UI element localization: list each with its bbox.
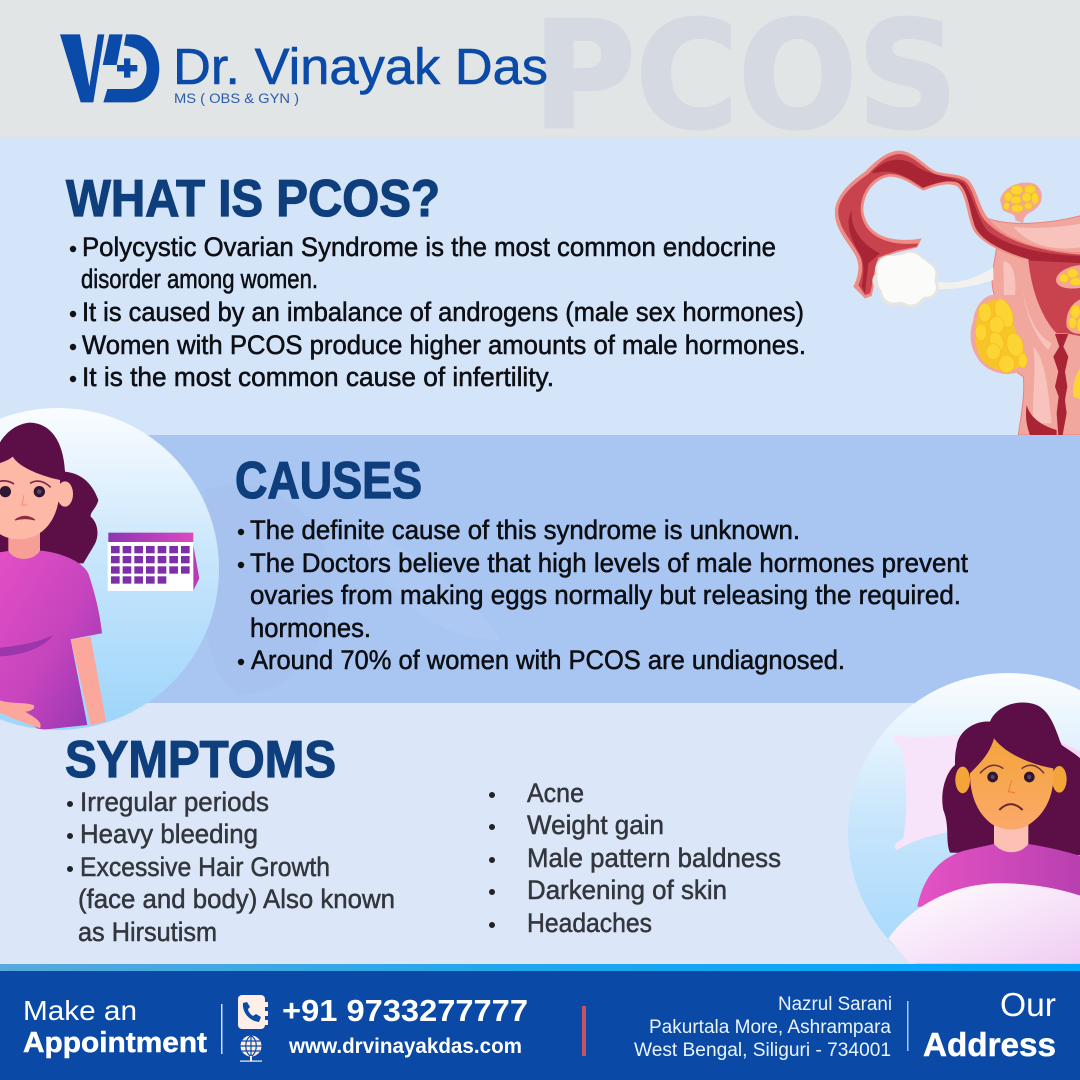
- cyst top: [1000, 182, 1042, 223]
- cyst large left: [970, 294, 1018, 374]
- list: symptoms right: Weight gain: [527, 810, 664, 840]
- heading: causes: CAUSES: [235, 452, 422, 510]
- neck: [8, 530, 40, 559]
- illustration: woman with calendar: [0, 408, 219, 730]
- face: [0, 457, 60, 539]
- ear: [57, 481, 73, 507]
- white ovary: [937, 267, 993, 289]
- list: symptoms left: (face and body) Also known: [78, 884, 395, 914]
- text block: causes: ovaries from making eggs normally but releasing the required.: [250, 580, 961, 610]
- text block: causes: The definite cause of this syndrome is unknown.: [250, 515, 800, 545]
- arm: [71, 637, 106, 725]
- eyes and mouth: [34, 486, 45, 497]
- list: symptoms left: Irregular periods: [80, 787, 269, 817]
- logo: Dr. Vinayak Das: [60, 34, 548, 106]
- shirt: [917, 844, 1080, 910]
- list: symptoms right: Darkening of skin: [527, 875, 727, 905]
- text: our address: Address: [923, 1026, 1056, 1063]
- ears: [955, 766, 1067, 793]
- text block: causes: hormones.: [250, 613, 371, 643]
- cysts right edge: [1056, 265, 1080, 288]
- text block: what is PCOS: It is caused by an imbalance of androgens (male sex hormones): [82, 297, 804, 327]
- hair: [942, 702, 1080, 855]
- uterus body: [983, 215, 1080, 435]
- fallopian tube: [835, 151, 1080, 298]
- icon: calendar: [108, 533, 199, 591]
- panel: header background: [0, 0, 1080, 137]
- text block: causes: [238, 515, 968, 675]
- text block: what is PCOS: Women with PCOS produce higher amounts of male hormones.: [82, 330, 806, 360]
- logo qualification: MS ( OBS & GYN ): [174, 91, 299, 106]
- list: symptoms left: [67, 787, 395, 947]
- footer strip: [0, 964, 1080, 971]
- text: phone number: +91 9733277777: [282, 993, 528, 1028]
- text block: what is PCOS: [70, 232, 806, 392]
- list: symptoms right: Acne: [527, 778, 584, 808]
- text: make an appointment: Make an: [23, 995, 137, 1026]
- text block: causes: The Doctors believe that high levels of male hormones prevent: [250, 548, 968, 578]
- list: symptoms left: Excessive Hair Growth: [80, 852, 330, 882]
- text: make an appointment: Appointment: [23, 1027, 207, 1059]
- text: our address: [923, 986, 1056, 1063]
- neck: [994, 825, 1028, 852]
- face: [970, 738, 1054, 830]
- heading: what is PCOS: WHAT IS PCOS?: [66, 170, 440, 228]
- list: symptoms right: Headaches: [527, 908, 652, 938]
- text: website: www.drvinayakdas.com: [288, 1035, 522, 1058]
- logo name: Dr. Vinayak Das: [173, 38, 548, 95]
- icon: VD monogram: [60, 34, 159, 102]
- text: address lines: Pakurtala More, Ashrampara: [649, 1017, 891, 1038]
- panel: footer: [0, 971, 1080, 1080]
- circle backdrop: [848, 673, 1080, 993]
- list: symptoms right: [489, 778, 781, 938]
- pillow: [894, 734, 961, 850]
- eyes and mouth: [987, 772, 998, 782]
- list: symptoms right: Male pattern baldness: [527, 843, 781, 873]
- text block: what is PCOS: disorder among women.: [81, 264, 318, 294]
- blanket: [888, 883, 1080, 963]
- text block: what is PCOS: Polycystic Ovarian Syndrome is the most common endocrine: [82, 232, 776, 262]
- list: symptoms left: Heavy bleeding: [80, 819, 258, 849]
- text: our address: Our: [1000, 986, 1056, 1023]
- text block: what is PCOS: It is the most common cause of infertility.: [82, 362, 554, 392]
- shirt: [0, 551, 102, 730]
- hair: [0, 423, 98, 563]
- text: address lines: [634, 994, 892, 1061]
- circle backdrop: [0, 408, 219, 730]
- text: address lines: West Bengal, Siliguri - 734001: [634, 1040, 891, 1061]
- list: symptoms left: as Hirsutism: [78, 917, 217, 947]
- text: make an appointment: [23, 995, 207, 1059]
- icon: phone book: [238, 995, 268, 1029]
- illustration: uterus and ovaries: [835, 151, 1080, 435]
- illustration: woman in bed: [848, 673, 1080, 993]
- icon: globe: [240, 1036, 262, 1062]
- heading: symptoms: SYMPTOMS: [65, 731, 336, 789]
- text block: causes: Around 70% of women with PCOS are undiagnosed.: [251, 645, 845, 675]
- panel: causes background: [0, 435, 1080, 703]
- panel: symptoms background: [0, 703, 1080, 965]
- uterus cavity: [1028, 260, 1080, 337]
- panel: what is PCOS background: [0, 137, 1080, 435]
- text: address lines: Nazrul Sarani: [778, 994, 892, 1015]
